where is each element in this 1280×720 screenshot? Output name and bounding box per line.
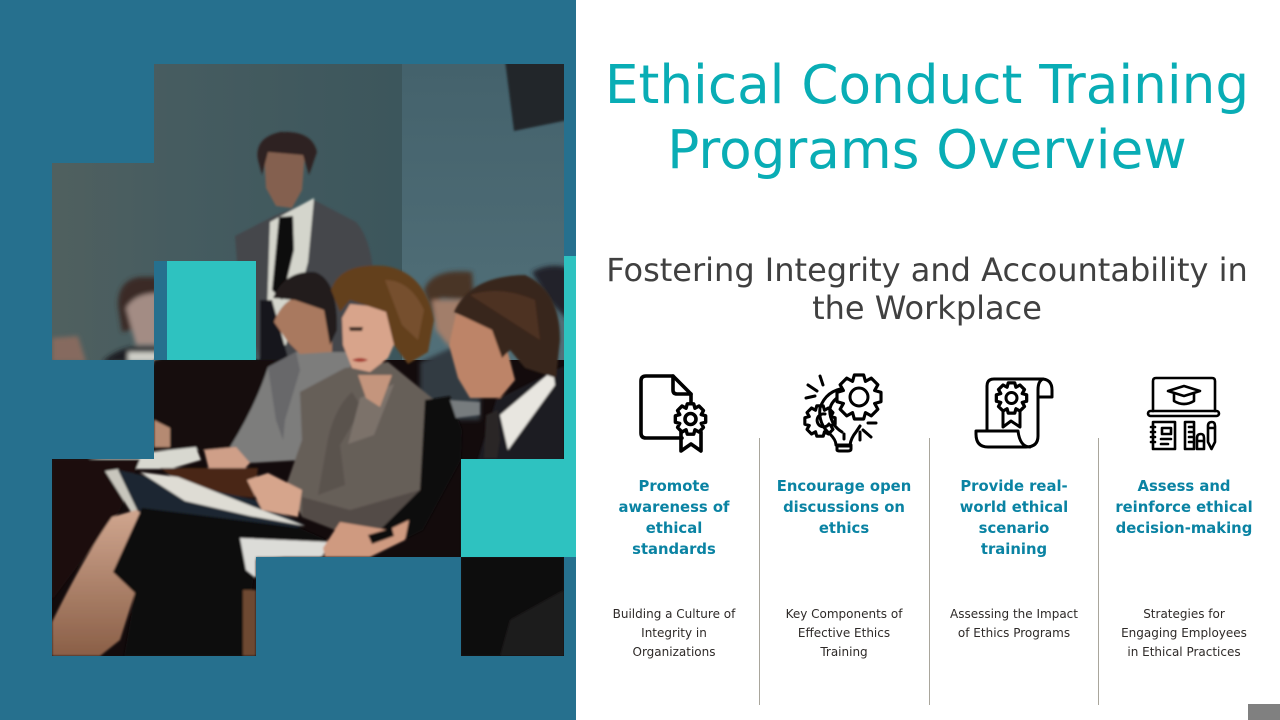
icon: document with award badge <box>639 374 708 453</box>
icon: laptop with graduation cap and stationery <box>1146 376 1220 450</box>
title: Programs Overview <box>667 119 1187 181</box>
heading: scenario training: Provide real-world ethical scenario training <box>960 478 1068 558</box>
photo: ethics training audience in mosaic crop <box>52 64 576 656</box>
page number tab <box>1248 704 1280 720</box>
icon: scroll certificate <box>974 378 1054 448</box>
title: Ethical Conduct Training <box>605 54 1249 116</box>
heading: promote awareness: Promote awareness of ethical standards <box>619 478 729 558</box>
subtitle: Fostering Integrity and Accountability in <box>606 251 1248 289</box>
panel: photo panel <box>0 0 576 720</box>
title <box>605 54 1249 181</box>
accent: teal square right <box>461 459 576 557</box>
text: culture of integrity: Building a Culture of Integrity in Organizations <box>613 607 735 659</box>
heading: encourage discussions: Encourage open discussions on ethics <box>777 478 911 537</box>
subtitle <box>606 251 1248 327</box>
subtitle: the Workplace <box>812 289 1042 327</box>
accent: teal square left <box>167 261 256 360</box>
accent: teal strip <box>564 256 576 459</box>
text: key components: Key Components of Effective Ethics Training <box>786 607 902 659</box>
text: assessing impact: Assessing the Impact of Ethics Programs <box>950 607 1078 640</box>
icon: light bulb with gears <box>803 373 883 452</box>
text: engagement strategies: Strategies for Engaging Employees in Ethical Practices <box>1121 607 1247 659</box>
heading: assess and reinforce: Assess and reinforce ethical decision-making <box>1115 478 1253 537</box>
